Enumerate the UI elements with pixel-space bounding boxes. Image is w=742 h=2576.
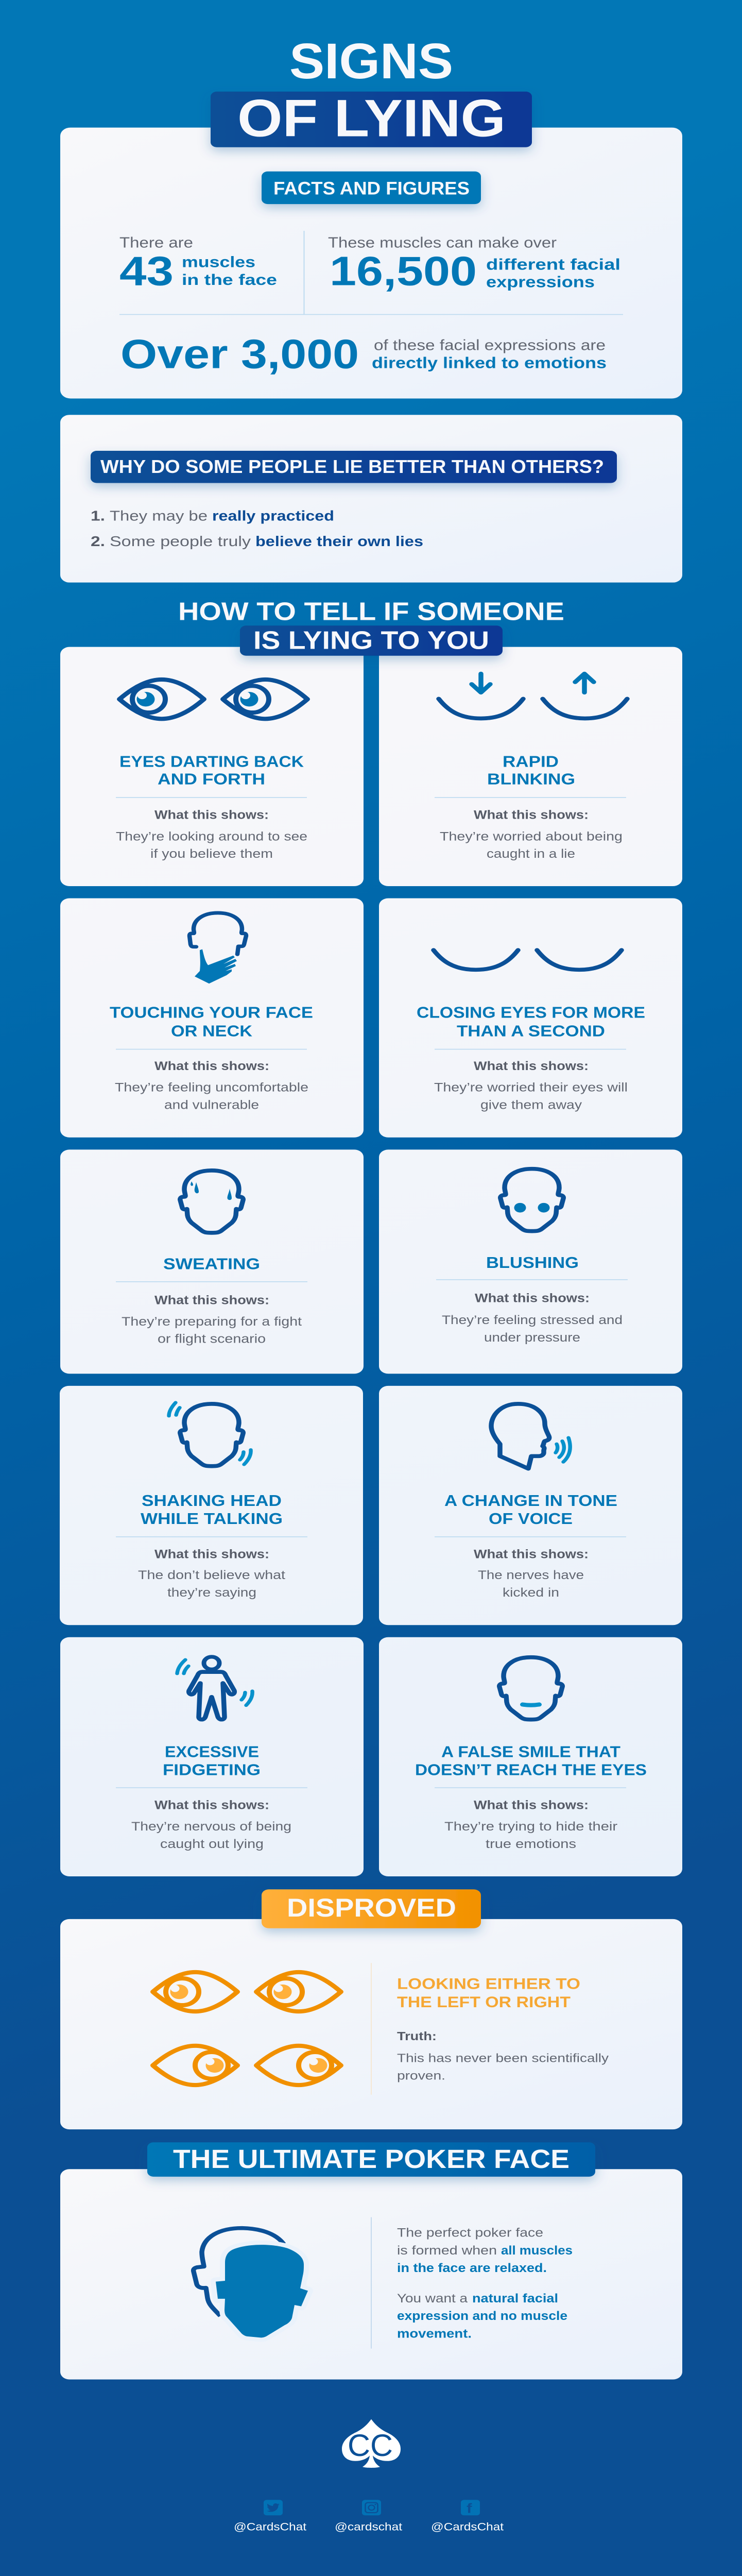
heading: BLINKING (487, 771, 575, 788)
heading: DOESN’T REACH THE EYES (415, 1761, 647, 1779)
stat: 43 muscles: muscles (182, 254, 255, 271)
icon: blushing head (501, 1169, 563, 1231)
icon: hand on neck (189, 913, 246, 984)
icon: shaking head (169, 1402, 251, 1466)
poker face text: all muscles (501, 2243, 573, 2257)
logo: cards chat spade (342, 2419, 401, 2468)
stat: over 3,000: directly linked to emotions (372, 354, 607, 371)
reason 1: They may be (110, 508, 208, 524)
panel: disproved (60, 1919, 682, 2129)
icon: relaxed face (194, 2228, 308, 2337)
what this shows: They’re trying to hide their (444, 1819, 617, 1833)
what this shows (444, 1798, 617, 1851)
what this shows (131, 1798, 291, 1851)
heading (417, 1004, 645, 1040)
logo: cards chat spade: CC (348, 2429, 393, 2463)
heading (487, 753, 575, 788)
card: sweating (60, 1149, 364, 1374)
heading: looking either way: LOOKING EITHER TO (397, 1976, 580, 1993)
pill heading: why (91, 451, 617, 483)
what this shows: They’re worried their eyes will (434, 1080, 628, 1094)
truth text: Truth: (397, 2029, 437, 2043)
social: facebook: @CardsChat (431, 2521, 504, 2533)
what this shows: they’re saying (167, 1585, 256, 1599)
what this shows: and vulnerable (164, 1097, 259, 1112)
card: fidgeting (60, 1637, 364, 1876)
pill heading: ultimate poker face: THE ULTIMATE POKER FACE (173, 2144, 570, 2174)
pill heading: facts and figures (262, 172, 481, 204)
poker face text (397, 2225, 573, 2341)
stat: 16,500 expressions: expressions (486, 274, 595, 291)
what this shows: caught in a lie (487, 846, 575, 860)
card: closing eyes (379, 899, 682, 1138)
stat: 16,500 expressions: different facial (486, 256, 620, 274)
icon: false smile head (499, 1657, 562, 1720)
panel: facts and figures (60, 128, 682, 399)
what this shows: caught out lying (160, 1837, 264, 1851)
what this shows: They’re feeling uncomfortable (115, 1080, 308, 1094)
poker face text: You want a (397, 2291, 468, 2306)
social: instagram: @cardschat (335, 2521, 402, 2533)
what this shows (434, 1059, 628, 1112)
what this shows: What this shows: (154, 1547, 269, 1561)
icon: darting eyes (119, 680, 307, 719)
heading (415, 1743, 647, 1779)
truth text: proven. (397, 2069, 445, 2082)
icon: four orange eyes (153, 1972, 341, 2085)
what this shows (115, 1059, 308, 1112)
pill heading: facts and figures: FACTS AND FIGURES (273, 179, 470, 198)
what this shows: What this shows: (154, 807, 269, 822)
what this shows: What this shows: (154, 1798, 269, 1812)
reason 2 (91, 533, 423, 549)
card: rapid blinking (379, 647, 682, 886)
heading (141, 1492, 283, 1528)
what this shows (440, 807, 623, 860)
stat: 16,500 expressions: 16,500 (330, 248, 477, 294)
what this shows: They’re feeling stressed and (442, 1313, 623, 1327)
icon: blinking eyes with arrows (439, 674, 627, 718)
card: touching face (60, 899, 364, 1138)
heading: how to tell: IS LYING TO YOU (253, 626, 489, 654)
what this shows (474, 1547, 589, 1599)
heading: EXCESSIVE (165, 1743, 259, 1761)
heading: A CHANGE IN TONE (444, 1492, 617, 1510)
what this shows: What this shows: (154, 1293, 269, 1307)
heading: how to tell: HOW TO TELL IF SOMEONE (178, 597, 564, 625)
what this shows: What this shows: (154, 1059, 269, 1073)
heading: OR NECK (171, 1023, 252, 1040)
reason 2: Some people truly (110, 533, 251, 549)
stat: 43 muscles: There are (119, 234, 193, 251)
heading: TOUCHING YOUR FACE (110, 1004, 313, 1022)
social: facebook (431, 2500, 504, 2533)
heading (119, 753, 304, 788)
reason 1: 1. (91, 508, 105, 524)
what this shows: true emotions (486, 1837, 576, 1851)
social: facebook: f (467, 2501, 472, 2516)
title: SIGNS (289, 33, 453, 89)
heading: FIDGETING (163, 1761, 261, 1779)
stat: 16,500 expressions: These muscles can make over (328, 234, 557, 251)
card: eyes darting (60, 647, 364, 886)
what this shows (116, 807, 307, 860)
icon: speaking head with sound waves (491, 1404, 570, 1469)
stat: over 3,000 (120, 331, 607, 377)
poker face text: movement. (397, 2326, 472, 2341)
what this shows: kicked in (503, 1585, 559, 1599)
heading: how to tell (178, 597, 564, 656)
stat: over 3,000: Over 3,000 (120, 331, 359, 377)
reason 1: really practiced (212, 508, 334, 524)
pill heading: disproved (262, 1889, 481, 1928)
social: twitter: @CardsChat (234, 2521, 306, 2533)
heading: A FALSE SMILE THAT (441, 1743, 620, 1761)
reason 2: believe their own lies (255, 533, 423, 549)
social: instagram (335, 2500, 402, 2533)
card: shaking head (60, 1386, 363, 1625)
heading: RAPID (503, 753, 559, 771)
poker face text: is formed when (397, 2243, 497, 2257)
title: OF LYING (237, 89, 506, 148)
panel: why do some people lie better (60, 415, 682, 583)
what this shows (122, 1293, 302, 1346)
heading: looking either way (397, 1976, 580, 2011)
stat: over 3,000: of these facial expressions are (374, 337, 606, 353)
what this shows: The nerves have (478, 1568, 584, 1582)
what this shows: They’re nervous of being (131, 1819, 291, 1833)
icon: closed eyes (434, 950, 622, 970)
stat: 43 muscles: 43 (119, 248, 174, 294)
heading (444, 1492, 617, 1528)
truth text (397, 2029, 609, 2082)
heading: OF VOICE (489, 1510, 573, 1528)
poker face text: natural facial (472, 2291, 558, 2306)
card: blushing (379, 1149, 682, 1374)
stat: 43 muscles: in the face (182, 272, 277, 289)
what this shows: give them away (480, 1097, 582, 1112)
what this shows (442, 1291, 623, 1344)
heading: CLOSING EYES FOR MORE (417, 1004, 645, 1022)
poker face text: in the face are relaxed. (397, 2261, 547, 2275)
truth text: This has never been scientifically (397, 2051, 609, 2065)
heading: looking either way: THE LEFT OR RIGHT (397, 1994, 571, 2011)
what this shows: What this shows: (474, 1798, 589, 1812)
what this shows: They’re worried about being (440, 829, 623, 843)
what this shows: if you believe them (150, 846, 273, 860)
what this shows: They’re looking around to see (116, 829, 307, 843)
stat: 43 muscles (119, 234, 277, 294)
heading: AND FORTH (158, 771, 265, 788)
what this shows: What this shows: (475, 1291, 590, 1305)
what this shows: The don’t believe what (138, 1568, 285, 1582)
title (211, 33, 532, 148)
pill heading: disproved: DISPROVED (287, 1893, 456, 1922)
social: twitter (234, 2500, 306, 2533)
heading: EYES DARTING BACK (119, 753, 304, 771)
card: tone of voice (379, 1386, 682, 1625)
what this shows: What this shows: (474, 807, 589, 822)
panel: ultimate poker face (60, 2169, 682, 2380)
what this shows (138, 1547, 285, 1599)
poker face text: The perfect poker face (397, 2225, 543, 2240)
icon: fidgeting person (177, 1657, 252, 1720)
poker face text: expression and no muscle (397, 2309, 567, 2323)
reason 2: 2. (91, 533, 105, 549)
heading: SWEATING (163, 1256, 260, 1273)
icon: sweating head (180, 1171, 243, 1233)
heading: BLUSHING (486, 1254, 579, 1272)
reason 1 (91, 508, 334, 524)
pill heading: why: WHY DO SOME PEOPLE LIE BETTER THAN OTHERS? (100, 456, 604, 477)
heading: SHAKING HEAD (142, 1492, 282, 1510)
stat: 16,500 expressions (328, 234, 620, 294)
what this shows: They’re preparing for a fight (122, 1314, 302, 1328)
what this shows: What this shows: (474, 1547, 589, 1561)
heading: THAN A SECOND (457, 1023, 605, 1040)
what this shows: or flight scenario (158, 1331, 266, 1346)
heading: WHILE TALKING (141, 1510, 283, 1528)
what this shows: under pressure (484, 1330, 580, 1344)
heading (163, 1743, 261, 1779)
what this shows: What this shows: (474, 1059, 589, 1073)
card: false smile (379, 1637, 682, 1876)
heading (110, 1004, 313, 1040)
